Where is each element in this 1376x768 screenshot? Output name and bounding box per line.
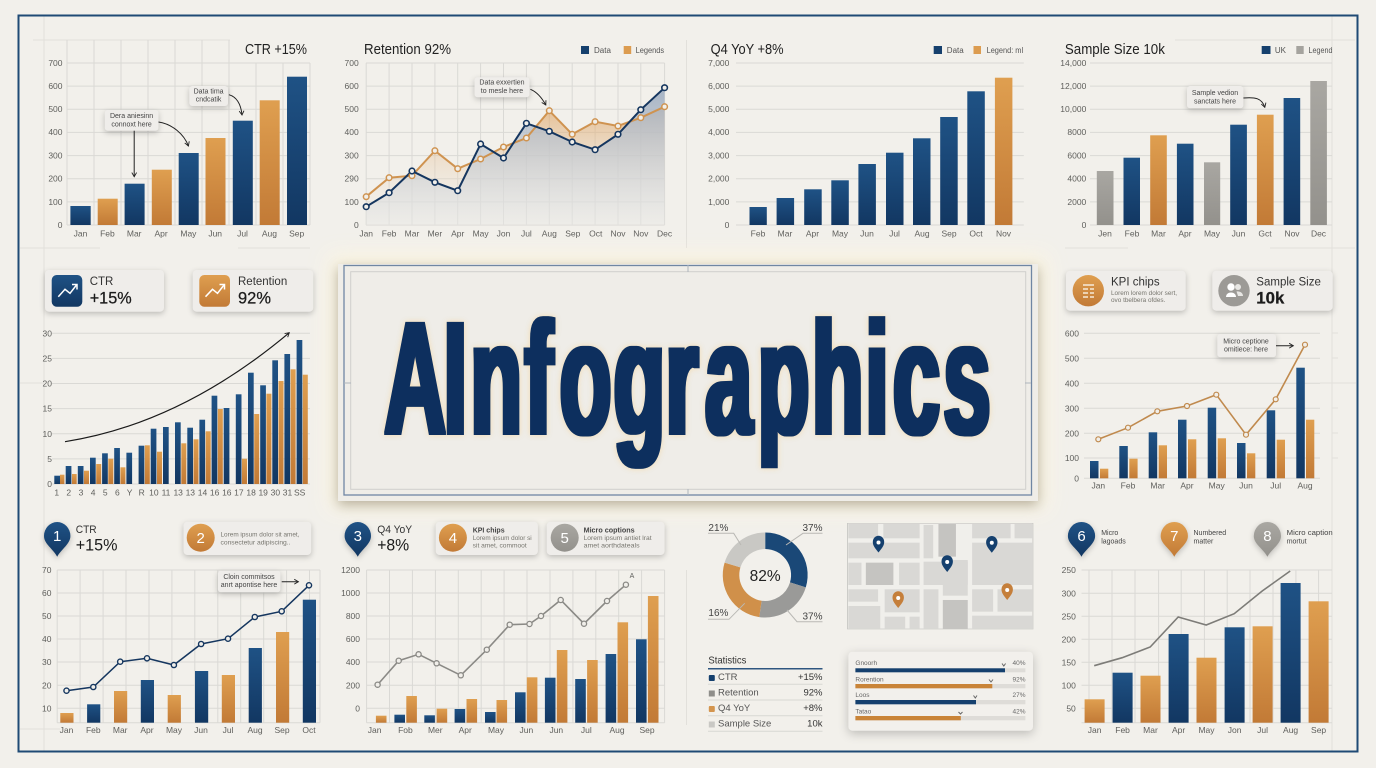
chart: CTR bars: 400 — [48, 127, 63, 137]
callout: data annotation: connoxt here — [111, 122, 152, 128]
chart: Q4 grouped bars and gray line: 600 — [346, 634, 360, 644]
chart: CTR bars: 300 — [48, 150, 63, 160]
chart: donut: 21% — [708, 523, 729, 534]
marker 7: matter — [1194, 538, 1214, 545]
chart: Sample Size bars: 6000 — [1067, 150, 1087, 160]
chart: CTR line and bars: Sep — [274, 725, 290, 735]
chart: Retention lines: Apr — [451, 228, 464, 238]
chart: Q4 YoY bars: 3,000 — [708, 150, 730, 160]
chart: bars and gray line: 100 — [1062, 680, 1076, 690]
chart: CTR line and bars: 20 — [42, 680, 52, 690]
chart: Q4 grouped bars and gray line — [341, 565, 665, 735]
callout: data time: cndcatik — [196, 96, 222, 104]
chart: grouped daily bars with trend arrow: 18 — [246, 488, 256, 498]
icon: people — [1218, 275, 1250, 306]
marker 6 — [1068, 522, 1126, 557]
chart: CTR bars: Sep — [289, 228, 305, 238]
table: Statistics: 10k — [807, 719, 823, 730]
chart: Retention lines: 100 — [345, 197, 359, 207]
legend: Legends — [636, 46, 664, 55]
chart: Sample Size bars — [1060, 42, 1332, 238]
chart: grouped daily bars with trend arrow: 5 — [103, 488, 108, 498]
marker 6: 6 — [1077, 528, 1086, 545]
panel: progress bars: 42% — [1012, 708, 1026, 715]
chart: Q4 grouped bars and gray line: Sep — [639, 725, 655, 735]
chart: CTR line and bars: 60 — [42, 588, 52, 598]
callout: Micro ceptione — [1223, 338, 1269, 346]
chart: Q4 grouped bars and gray line: Fob — [398, 725, 413, 735]
panel: progress bars: Gnoorh — [855, 660, 877, 667]
chart: Retention lines: Oct — [589, 228, 603, 238]
chip 2: text: consectetur adipiscing.. — [220, 539, 291, 546]
chart: Retention lines: Jan — [359, 228, 373, 238]
chart: Sample Size bars: 12,000 — [1060, 81, 1087, 91]
callout: Cloin commitsos — [223, 574, 275, 581]
chart: Retention lines: 400 — [345, 127, 359, 137]
chart: Retention lines: 600 — [345, 81, 359, 91]
callout — [474, 77, 546, 105]
chart: CTR line and bars: Oct — [302, 725, 316, 735]
chart: CTR line and bars: 40 — [42, 634, 52, 644]
chart: Q4 YoY bars: Jun — [860, 228, 874, 238]
chart: CTR line and bars: May — [166, 725, 183, 735]
callout: Data exxertien — [479, 80, 525, 86]
chart: Sample Size bars: Mar — [1151, 228, 1166, 238]
icon: trend orange — [199, 275, 230, 307]
panel: progress bars: 27% — [1012, 692, 1026, 699]
chart: Retention lines: 500 — [345, 104, 359, 114]
chart: bars and orange line: 100 — [1065, 453, 1079, 463]
chart: grouped daily bars with trend arrow: 20 — [43, 378, 52, 388]
callout — [218, 571, 298, 592]
chart: Q4 grouped bars and gray line: A — [630, 573, 635, 580]
chart: Sample Size bars: 0 — [1082, 220, 1087, 230]
chart: Sample Size bars: Jen — [1098, 228, 1112, 238]
chip 2: text: Lorem ipsum dolor sit amet, — [220, 532, 300, 539]
chip 5: Micro captions — [547, 522, 665, 555]
chart: grouped daily bars with trend arrow: 2 — [66, 488, 71, 498]
chart: donut: 82% — [750, 568, 781, 585]
panel: progress bars: Loos — [855, 692, 870, 699]
chart: Q4 YoY bars: Apr — [806, 228, 819, 238]
chart: bars and orange line: Jun — [1239, 480, 1253, 490]
chip 2: text: 2 — [197, 530, 205, 547]
chart: bars and gray line: 250 — [1062, 565, 1076, 575]
chart: grouped daily bars with trend arrow: 11 — [162, 488, 171, 498]
chart: grouped daily bars with trend arrow: 0 — [47, 479, 52, 489]
chart: Retention lines: Jul — [521, 228, 532, 238]
title: AInfographics — [385, 290, 991, 468]
table: Statistics: +8% — [803, 703, 823, 714]
chart: grouped daily bars with trend arrow: 13 — [173, 488, 183, 498]
chart: Q4 grouped bars and gray line: 400 — [346, 657, 360, 667]
icon: trend navy — [52, 275, 82, 307]
chart: bars and orange line: Apr — [1180, 480, 1194, 490]
chart: CTR bars: Mar — [127, 228, 142, 238]
chart: bars and orange line: Mar — [1150, 480, 1165, 490]
callout: data time — [189, 86, 242, 115]
chart: CTR bars: Apr — [154, 228, 168, 238]
chart: Q4 YoY bars: 6,000 — [708, 81, 730, 91]
chart: Sample Size bars: Feb — [1125, 228, 1140, 238]
chart: bars and gray line: May — [1198, 725, 1215, 735]
marker 1: CTR: 1 — [53, 528, 61, 545]
chart: Q4 grouped bars and gray line: Aug — [609, 725, 625, 735]
legend: UK — [1275, 46, 1287, 55]
chart: CTR bars — [48, 40, 310, 238]
chart: bars and gray line: Sep — [1311, 725, 1326, 735]
chart: Sample Size bars: Apr — [1178, 228, 1192, 238]
chart: CTR line and bars: Jul — [223, 725, 234, 735]
chip: Retention: 92% — [238, 288, 271, 307]
chart: CTR line and bars: 50 — [42, 611, 52, 621]
chart: Retention lines: Dec — [657, 228, 673, 238]
chart: CTR bars: 600 — [48, 81, 63, 91]
marker 3: Q4 YoY: Q4 YoY — [377, 524, 413, 536]
chart: bars and gray line: Aug — [1283, 725, 1298, 735]
chart: grouped daily bars with trend arrow: 5 — [47, 454, 52, 464]
marker 6: lagoads — [1101, 538, 1126, 545]
chip: Retention: Retention — [238, 276, 287, 288]
marker 7 — [1161, 522, 1226, 557]
chart: CTR bars: 200 — [48, 174, 63, 184]
marker 8: Micro caption — [1287, 530, 1333, 537]
panel: progress bars: 92% — [1012, 676, 1026, 683]
chart: bars and orange line: 0 — [1074, 473, 1079, 483]
chip: KPI chips — [1066, 271, 1186, 311]
chart: Q4 grouped bars and gray line: May — [488, 725, 505, 735]
icon: map pins — [873, 536, 1013, 608]
chart: bars and gray line — [1062, 565, 1332, 735]
chart: Q4 YoY bars: May — [832, 228, 849, 238]
marker 1: CTR: +15% — [76, 537, 118, 555]
chart: donut — [708, 523, 823, 622]
chart: grouped daily bars with trend arrow: 3 — [79, 488, 84, 498]
chart: Q4 grouped bars and gray line: Apr — [459, 725, 472, 735]
chip 4: KPI chips: sit amet, commoot — [473, 543, 527, 550]
chart: bars and gray line: Jon — [1228, 725, 1242, 735]
chart: Q4 YoY bars: 2,000 — [708, 174, 730, 184]
chart: CTR line and bars: Mar — [113, 725, 128, 735]
chart: Sample Size bars: Jun — [1232, 228, 1246, 238]
chart: CTR line and bars: Aug — [247, 725, 263, 735]
chart: bars and orange line: 500 — [1065, 353, 1079, 363]
chart: Q4 YoY bars: 0 — [725, 220, 730, 230]
chart: bars and orange line: Jul — [1270, 480, 1281, 490]
chart: grouped daily bars with trend arrow: 1 — [54, 488, 59, 498]
title card — [338, 264, 1038, 501]
chart: grouped daily bars with trend arrow: 19 — [258, 488, 268, 498]
callout: data annotation: Dera aniesinn — [110, 113, 153, 120]
chart: Sample Size bars: 14,000 — [1060, 58, 1087, 68]
chart: Q4 YoY bars: Nov — [996, 228, 1012, 238]
chart: Retention lines: Nov — [633, 228, 649, 238]
chip 4: KPI chips: Lorem ipsum dolor si — [473, 535, 532, 542]
chart: bars and gray line: Apr — [1172, 725, 1185, 735]
chart: Retention lines: Mer — [428, 228, 442, 238]
chart: Q4 YoY bars: 5,000 — [708, 104, 730, 114]
chart: Retention lines: Jon — [497, 228, 511, 238]
chart: grouped daily bars with trend arrow: 13 — [186, 488, 195, 498]
chart: Q4 grouped bars and gray line: 1200 — [341, 565, 360, 575]
chart: grouped daily bars with trend arrow: 16 — [222, 488, 232, 498]
chart: grouped daily bars with trend arrow: 17 — [234, 488, 244, 498]
map — [847, 523, 1033, 629]
panel: progress bars: Rorention — [855, 676, 884, 683]
chart: Q4 grouped bars and gray line: Jun — [549, 725, 563, 735]
chart: bars and orange line — [1065, 328, 1320, 490]
marker 7: 7 — [1170, 528, 1178, 545]
chart: CTR bars: Feb — [100, 228, 115, 238]
legend: Legend — [1308, 46, 1332, 55]
chip 5: Micro captions: Lorem ipsum antiet lrat — [584, 535, 652, 542]
chart: grouped daily bars with trend arrow — [43, 328, 310, 498]
chart: bars and orange line: Jan — [1091, 480, 1105, 490]
marker 8 — [1254, 522, 1333, 557]
chart: grouped daily bars with trend arrow: Y — [127, 488, 133, 498]
chart: bars and gray line: Mar — [1143, 725, 1158, 735]
chart: bars and gray line: 200 — [1062, 634, 1076, 644]
table: Statistics: Q4 YoY — [718, 703, 751, 714]
chart: Retention lines: 0 — [354, 220, 359, 230]
chart: Q4 grouped bars and gray line: Jun — [520, 725, 534, 735]
chip: Retention — [193, 270, 313, 312]
chart: CTR line and bars: 70 — [42, 565, 52, 575]
chart: bars and orange line: Feb — [1121, 480, 1136, 490]
icon: document — [1073, 275, 1104, 306]
chart: bars and gray line: 250 — [1062, 611, 1076, 621]
heading: Retention: Retention 92% — [364, 42, 451, 58]
legend: Legend: ml — [987, 46, 1023, 55]
chart: grouped daily bars with trend arrow: 31 — [283, 488, 292, 498]
legend — [934, 46, 1023, 55]
chart: Sample Size bars: 2000 — [1067, 197, 1087, 207]
chart: donut: 37% — [802, 523, 823, 534]
chart: CTR bars: Jan — [74, 228, 88, 238]
marker 8: mortut — [1287, 538, 1307, 545]
chip: Sample Size: 10k — [1256, 288, 1285, 307]
chart: Q4 YoY bars: 7,000 — [708, 58, 730, 68]
chart: Q4 YoY bars: 1,000 — [708, 197, 730, 207]
table: Statistics: Sample Size — [718, 719, 771, 730]
chart: CTR bars: May — [180, 228, 197, 238]
arrow: trend — [65, 333, 289, 442]
chart: CTR bars: 700 — [48, 58, 63, 68]
chart: grouped daily bars with trend arrow: 4 — [91, 488, 96, 498]
callout: omitiece: here — [1224, 346, 1268, 354]
chart: grouped daily bars with trend arrow: 15 — [43, 404, 52, 414]
chart: Sample Size bars: Gct — [1258, 228, 1272, 238]
chart: grouped daily bars with trend arrow: SS — [294, 488, 306, 498]
panel: progress bars: 40% — [1012, 660, 1026, 667]
chart: CTR line and bars: Apr — [140, 725, 154, 735]
chart: bars and gray line: Feb — [1115, 725, 1130, 735]
chart: CTR line and bars: Feb — [86, 725, 101, 735]
chart: CTR bars: Jul — [237, 228, 248, 238]
chart: grouped daily bars with trend arrow: 30 — [43, 328, 52, 338]
chart: grouped daily bars with trend arrow: 16 — [210, 488, 220, 498]
chart: CTR line and bars — [42, 565, 320, 735]
callout — [1187, 86, 1265, 108]
chart: Sample Size bars: 10,000 — [1060, 104, 1087, 114]
chart: grouped daily bars with trend arrow: 6 — [115, 488, 120, 498]
marker 3: Q4 YoY: +8% — [377, 537, 410, 555]
table: Statistics: Statistics — [708, 655, 746, 667]
chart: CTR line and bars: Jan — [60, 725, 74, 735]
chart: Retention lines: 300 — [345, 150, 359, 160]
table: Statistics: Retention — [718, 687, 759, 698]
chart: Retention lines: Aug — [542, 228, 557, 238]
chart: Sample Size bars: 4000 — [1067, 174, 1087, 184]
chart: Sample Size bars: Nov — [1284, 228, 1300, 238]
table: Statistics: +15% — [798, 672, 823, 683]
chip: CTR — [45, 270, 164, 312]
heading: CTR: CTR +15% — [245, 42, 307, 58]
chip: CTR: CTR — [90, 276, 113, 288]
chart: Q4 YoY bars: Jul — [889, 228, 900, 238]
chip 4: KPI chips — [436, 522, 538, 555]
chart: Q4 grouped bars and gray line: Jan — [368, 725, 382, 735]
marker 3: Q4 YoY — [345, 522, 413, 557]
chart: CTR bars: 0 — [58, 220, 63, 230]
heading: Q4 YoY: Q4 YoY +8% — [711, 42, 784, 58]
chart: grouped daily bars with trend arrow: 10 — [149, 488, 159, 498]
chart: grouped daily bars with trend arrow: 25 — [43, 353, 52, 363]
chart: Q4 YoY bars: Sep — [941, 228, 957, 238]
marker 1: CTR: CTR — [76, 524, 97, 536]
chart: Retention lines: 700 — [345, 58, 359, 68]
chip: Sample Size — [1212, 271, 1333, 311]
marker 3: Q4 YoY: 3 — [354, 528, 362, 545]
chip: KPI chips: Lorem lorem dolor sert, — [1111, 290, 1177, 297]
chart: Q4 YoY bars: Feb — [751, 228, 766, 238]
chart: bars and orange line: 300 — [1065, 403, 1079, 413]
chart: Retention lines — [345, 42, 673, 238]
marker 7: Numbered — [1194, 530, 1226, 537]
callout: data time: Data tima — [194, 88, 224, 96]
callout: sanctats here — [1194, 98, 1236, 106]
chart: CTR bars: 500 — [48, 104, 63, 114]
chip 5: Micro captions: amet aorthdateals — [584, 543, 640, 550]
table: Statistics — [708, 655, 823, 731]
chart: bars and orange line: 600 — [1065, 328, 1079, 338]
chart: Q4 grouped bars and gray line: 800 — [346, 611, 360, 621]
chart: bars and orange line: 400 — [1065, 378, 1079, 388]
marker 6: Micro — [1101, 530, 1118, 537]
chart: Q4 grouped bars and gray line: 1000 — [341, 588, 360, 598]
table: Statistics: CTR — [718, 672, 738, 683]
chart: bars and gray line: 50 — [1066, 703, 1076, 713]
chip: CTR: +15% — [90, 288, 132, 307]
chart: CTR bars: 100 — [48, 197, 63, 207]
chart: Sample Size bars: Dec — [1311, 228, 1327, 238]
chart: Q4 YoY bars: Mar — [778, 228, 792, 238]
callout: to mesle here — [481, 88, 523, 95]
marker 1: CTR — [44, 522, 118, 557]
chart: Retention lines: Nov — [610, 228, 626, 238]
table: Statistics: 92% — [803, 687, 823, 698]
chip 5: Micro captions: Micro coptions — [584, 528, 635, 535]
legend — [1262, 46, 1332, 55]
chart: Q4 grouped bars and gray line: Mer — [428, 725, 443, 735]
chart: CTR bars: Jun — [208, 228, 222, 238]
chip 5: Micro captions: 5 — [561, 530, 569, 547]
chart: Retention lines: Sep — [565, 228, 581, 238]
chip 4: KPI chips: 4 — [449, 530, 457, 547]
panel: progress bars: Tatao — [855, 708, 872, 715]
chart: Retention lines: 290 — [345, 174, 359, 184]
chart: grouped daily bars with trend arrow: R — [139, 488, 145, 498]
chart: CTR line and bars: 30 — [42, 657, 52, 667]
chart: Retention lines: Mar — [405, 228, 419, 238]
chart: bars and gray line: 300 — [1062, 588, 1076, 598]
chart: Retention lines: Feb — [382, 228, 397, 238]
panel: progress bars — [848, 652, 1033, 731]
chart: Q4 YoY bars: Oct — [969, 228, 983, 238]
chart: Sample Size bars: 8000 — [1067, 127, 1087, 137]
chart: bars and gray line: Jan — [1088, 725, 1102, 735]
marker 8: 8 — [1263, 528, 1272, 545]
chart: donut: 16% — [708, 608, 729, 619]
chart: bars and gray line: 150 — [1062, 657, 1076, 667]
chart: CTR line and bars: Jun — [194, 725, 208, 735]
chip 4: KPI chips: KPI chips — [473, 528, 505, 535]
legend — [581, 46, 664, 55]
chart: bars and orange line: Aug — [1297, 480, 1313, 490]
chart: grouped daily bars with trend arrow: 10 — [43, 429, 52, 439]
chart: CTR bars: Aug — [262, 228, 277, 238]
chart: Retention lines: May — [473, 228, 489, 238]
chart: bars and orange line: May — [1209, 480, 1225, 490]
chart: Q4 YoY bars: 4,000 — [708, 127, 730, 137]
chart: Sample Size bars: May — [1204, 228, 1221, 238]
chart: grouped daily bars with trend arrow: 30 — [271, 488, 280, 498]
chip 2: text — [184, 522, 311, 555]
chart: Q4 YoY bars — [708, 42, 1024, 238]
legend: Data — [947, 46, 964, 55]
chart: bars and gray line: Jul — [1257, 725, 1268, 735]
chip: KPI chips: KPI chips — [1111, 276, 1160, 288]
chart: CTR line and bars: 10 — [42, 703, 52, 713]
chart: Q4 grouped bars and gray line: Jul — [581, 725, 592, 735]
chip: Sample Size: Sample Size — [1256, 276, 1321, 288]
chip: KPI chips: ovo tbelbera ofdes. — [1111, 297, 1166, 304]
legend: Data — [594, 46, 611, 55]
heading: Sample Size: Sample Size 10k — [1065, 42, 1166, 58]
chart: grouped daily bars with trend arrow: 14 — [198, 488, 207, 498]
chart: Q4 grouped bars and gray line: 200 — [346, 680, 360, 690]
chart: Q4 YoY bars: Aug — [914, 228, 930, 238]
callout: data annotation — [105, 110, 188, 177]
title glow — [330, 256, 1046, 509]
chart: donut: 37% — [802, 611, 823, 622]
callout: anrt apontise here — [221, 582, 277, 589]
callout — [1217, 334, 1293, 357]
chart: bars and orange line: 200 — [1065, 428, 1079, 438]
chart: Q4 grouped bars and gray line: 0 — [355, 703, 360, 713]
callout: Sample vedion — [1192, 90, 1238, 97]
